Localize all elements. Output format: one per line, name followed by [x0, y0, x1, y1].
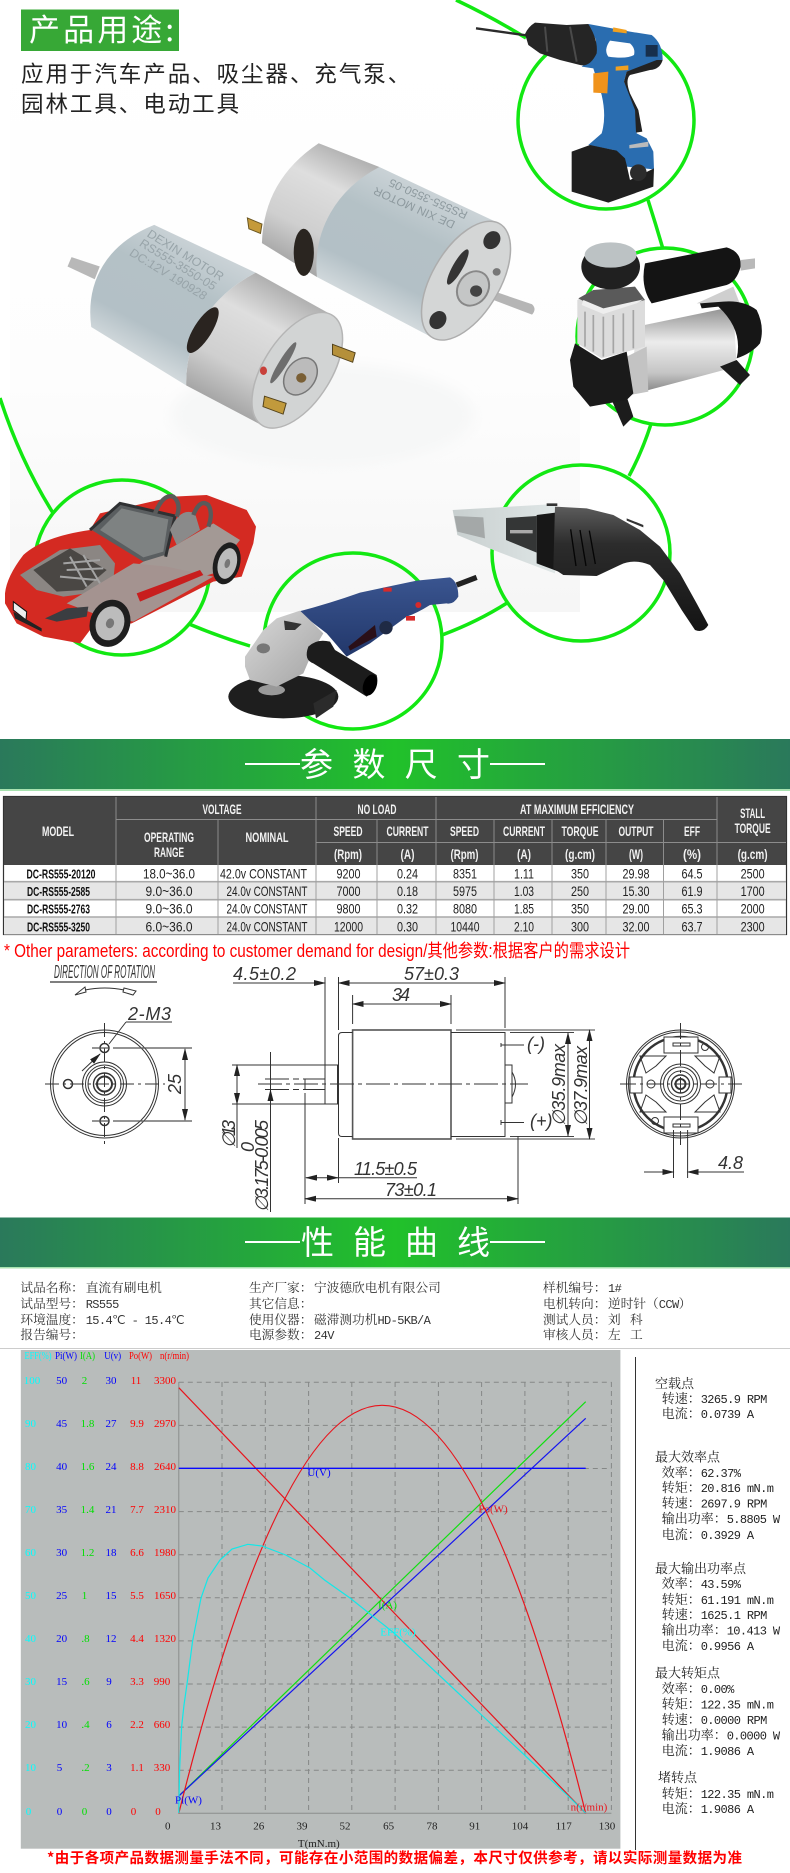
performance chart — [21, 1350, 620, 1850]
curve labels: U(V) — [307, 1467, 331, 1479]
row DC-RS555-2763: 9800 — [336, 901, 361, 917]
y scale: output power: 0 — [131, 1806, 137, 1818]
row DC-RS555-20120: 42.0v CONSTANT — [220, 865, 307, 881]
panel: key operating points: 转矩：61.191 mN.m — [662, 1589, 774, 1608]
table header: RANGE — [154, 844, 184, 860]
table header — [4, 797, 786, 865]
heading: product uses label: 产品用途: — [29, 5, 174, 50]
test information block: RS555 — [86, 1298, 119, 1312]
drawing: rear view — [620, 1023, 744, 1178]
panel: key operating points: 电流：0.9956 A — [662, 1635, 755, 1654]
y scale: output power: 9.9 — [130, 1418, 144, 1430]
drawing: side view: 0 — [238, 1142, 258, 1152]
photo: angle grinder — [228, 577, 477, 718]
y scale: input power: 0 — [57, 1806, 63, 1818]
row DC-RS555-20120: 29.98 — [622, 865, 650, 881]
row DC-RS555-2585: 1700 — [741, 883, 765, 899]
curve: output power Po — [179, 1405, 586, 1813]
table header: (g.cm) — [738, 846, 768, 862]
y scale: speed: 3300 — [154, 1375, 176, 1387]
row DC-RS555-3250 — [27, 918, 765, 934]
panel: product uses — [0, 0, 762, 729]
y scale: efficiency: 90 — [25, 1418, 36, 1430]
x scale: 91 — [469, 1820, 480, 1832]
y scale: output power: 3.3 — [130, 1676, 144, 1688]
photo: front motor — [68, 209, 362, 443]
table header: TORQUE — [562, 823, 598, 839]
test information block: 生产厂家： — [249, 1277, 312, 1296]
y scale: efficiency: 0 — [26, 1806, 32, 1818]
y scale: current: .8 — [81, 1633, 90, 1645]
x scale: 65 — [383, 1820, 395, 1832]
y scale: current: 1.6 — [81, 1461, 95, 1473]
y scale: output power: 2.2 — [130, 1719, 144, 1731]
x scale: 39 — [296, 1820, 308, 1832]
y scale: output power: 6.6 — [130, 1547, 144, 1559]
panel: key operating points: 输出功率：10.413 W — [662, 1620, 781, 1638]
curve labels: n(r/min) — [571, 1802, 608, 1814]
y scale: output power: 4.4 — [130, 1633, 144, 1645]
drawing: side view: (+) — [530, 1111, 552, 1131]
green connecting ring — [0, 0, 753, 729]
drawing: front view: DIRECTION OF ROTATION — [54, 962, 155, 982]
y scale: voltage: 18 — [106, 1547, 117, 1559]
panel: key operating points: 输出功率：0.0000 W — [662, 1724, 781, 1744]
row DC-RS555-2585: 0.18 — [397, 883, 418, 899]
axis titles: EFF(%) — [24, 1350, 52, 1362]
y scale: input power: 20 — [56, 1633, 68, 1645]
y scale: voltage: 3 — [106, 1762, 112, 1774]
photo: rear motor: RS555-3550-05 — [386, 176, 470, 221]
table header: OUTPUT — [618, 823, 654, 839]
y scale: input power: 25 — [56, 1590, 68, 1602]
row DC-RS555-20120: 9200 — [336, 865, 361, 881]
panel: key operating points: 堵转点 — [658, 1767, 698, 1786]
row DC-RS555-20120: 8351 — [453, 865, 477, 881]
y scale: current: 1.8 — [81, 1418, 95, 1430]
photo: cordless drill — [476, 23, 663, 203]
y scale: current: .6 — [81, 1676, 90, 1688]
table header: VOLTAGE — [202, 801, 242, 817]
y scale: speed: 0 — [155, 1806, 161, 1818]
y scale: input power: 15 — [56, 1676, 68, 1688]
row DC-RS555-20120 — [26, 865, 765, 881]
row DC-RS555-2763: 2000 — [741, 901, 765, 917]
photo: rear motor: DE XIN MOTOR — [371, 184, 457, 230]
test information block: 审核人员： — [543, 1324, 606, 1343]
x scale: 13 — [210, 1820, 222, 1832]
axis titles: n(r/min) — [160, 1350, 189, 1362]
test information block: 15.4℃ - 15.4℃ — [86, 1314, 184, 1328]
y scale: voltage: 30 — [106, 1375, 117, 1387]
panel: key operating points: 转矩：122.35 mN.m — [662, 1694, 774, 1713]
y scale: speed: 1320 — [154, 1633, 176, 1645]
x scale: 130 — [599, 1820, 616, 1832]
panel: key operating points: 电流：1.9086 A — [662, 1740, 755, 1759]
row DC-RS555-2763 — [27, 901, 765, 917]
y scale: current: 0 — [82, 1806, 88, 1818]
row DC-RS555-20120: 350 — [571, 865, 589, 881]
test information block: 工 — [630, 1324, 643, 1343]
note: other parameters: * Other parameters: according to customer demand for design/其他参数:根据客户的需求设计 — [4, 941, 630, 961]
row DC-RS555-3250: 2.10 — [514, 918, 534, 934]
y scale: speed: 330 — [154, 1762, 171, 1774]
curve labels: I(A) — [378, 1600, 397, 1612]
y scale: speed: 2310 — [154, 1504, 176, 1516]
soft shadow under motors — [171, 363, 474, 467]
chart grid — [179, 1382, 611, 1813]
table header: (%) — [683, 846, 701, 862]
curve labels: Po(W) — [478, 1504, 508, 1516]
row DC-RS555-2585: 15.30 — [622, 883, 650, 899]
panel: key operating points: 电流：1.9086 A — [662, 1798, 755, 1817]
y scale: current: 1 — [82, 1590, 87, 1602]
x scale: 52 — [340, 1820, 350, 1832]
technical drawing — [45, 962, 744, 1212]
row DC-RS555-2763: 24.0v CONSTANT — [226, 901, 308, 917]
x scale — [165, 1820, 616, 1850]
text: application description: 应用于汽车产品、吸尘器、充气泵、 — [21, 57, 412, 89]
row DC-RS555-2585: 5975 — [453, 883, 477, 899]
table header: (A) — [400, 846, 414, 862]
y scale: efficiency: 10 — [25, 1762, 36, 1774]
photo: front motor: DC:12V 190928 — [127, 246, 210, 303]
panel: key operating points: 最大效率点 — [655, 1447, 721, 1466]
row DC-RS555-3250: 6.0~36.0 — [146, 918, 193, 934]
table header: NOMINAL — [246, 829, 289, 845]
curve: voltage U — [179, 1467, 586, 1469]
drawing: side view: ∅35.9max — [549, 1043, 569, 1126]
row DC-RS555-2585: 24.0v CONSTANT — [226, 883, 308, 899]
test information block: 试品型号： — [20, 1293, 84, 1312]
axis titles: Po(W) — [129, 1350, 152, 1362]
y scale: efficiency: 70 — [25, 1504, 36, 1516]
y scale: input power: 35 — [56, 1504, 68, 1516]
table header: (Rpm) — [450, 846, 478, 862]
x scale: 78 — [426, 1820, 438, 1832]
row DC-RS555-20120: 2500 — [741, 865, 765, 881]
table row backgrounds — [4, 865, 786, 934]
row DC-RS555-2763: 0.32 — [397, 901, 418, 917]
drawing: side view: (-) — [527, 1034, 545, 1054]
y scale: voltage: 9 — [106, 1676, 112, 1688]
row DC-RS555-2763: 8080 — [453, 901, 477, 917]
backdrop: faint photo background — [10, 40, 580, 612]
curve labels: Pi(W) — [175, 1794, 202, 1806]
panel: key operating points — [655, 1373, 781, 1817]
drawing: side view: ∅3.175-0.005 — [252, 1119, 272, 1212]
row DC-RS555-2763: 9.0~36.0 — [146, 901, 193, 917]
table header: OPERATING — [144, 829, 194, 845]
row DC-RS555-3250: 300 — [571, 918, 589, 934]
y scale: efficiency: 50 — [25, 1590, 36, 1602]
row DC-RS555-2585: 9.0~36.0 — [146, 883, 193, 899]
row DC-RS555-2585 — [27, 883, 765, 899]
y scale: input power: 10 — [56, 1719, 68, 1731]
row DC-RS555-3250: 63.7 — [682, 918, 703, 934]
drawing: front view — [45, 962, 192, 1146]
section banner: performance curves: 性能曲线 — [301, 1216, 490, 1264]
test information block: CCW） — [659, 1293, 691, 1312]
panel: key operating points: 效率：62.37% — [662, 1462, 742, 1481]
y scale: output power: 1.1 — [130, 1762, 144, 1774]
y scale: current: 1.2 — [81, 1547, 94, 1559]
test information block: HD-5KB/A — [377, 1314, 432, 1328]
test information block: 科 — [630, 1309, 643, 1328]
test information block: 刘 — [608, 1309, 621, 1328]
row DC-RS555-2585: DC-RS555-2585 — [27, 884, 90, 899]
table header: (g.cm) — [565, 846, 595, 862]
y scale: voltage — [106, 1375, 117, 1818]
row DC-RS555-2763: 350 — [571, 901, 589, 917]
curve: input power Pi — [179, 1418, 586, 1796]
panel: key operating points: 最大输出功率点 — [655, 1558, 747, 1577]
row DC-RS555-3250: 2300 — [741, 918, 765, 934]
curve labels — [175, 1467, 608, 1814]
table header: (Rpm) — [334, 846, 362, 862]
axis titles: Pi(W) — [55, 1350, 77, 1362]
axis titles: U(v) — [104, 1350, 121, 1362]
row DC-RS555-20120: 0.24 — [397, 865, 418, 881]
y scale: efficiency: 60 — [25, 1547, 36, 1559]
y scale: current — [81, 1375, 95, 1818]
curve: current I — [179, 1402, 586, 1796]
test information block: 逆时针（ — [608, 1293, 659, 1312]
y scale: input power: 5 — [57, 1762, 63, 1774]
axis titles: I(A) — [80, 1350, 95, 1362]
y scale: speed: 1650 — [154, 1590, 176, 1602]
y scale: voltage: 27 — [106, 1418, 117, 1430]
y scale: voltage: 21 — [106, 1504, 116, 1516]
row DC-RS555-3250: 32.00 — [622, 918, 650, 934]
panel: key operating points: 电流：0.3929 A — [662, 1524, 755, 1543]
y scale: output power: 8.8 — [130, 1461, 144, 1473]
table header: (A) — [517, 846, 531, 862]
y scale: input power: 45 — [56, 1418, 68, 1430]
test information block: 报告编号： — [20, 1324, 84, 1343]
x scale: 117 — [556, 1820, 572, 1832]
section banner: parameters and dimensions: 参数尺寸 — [300, 738, 490, 786]
y scale: speed: 2640 — [154, 1461, 176, 1473]
photo: cutaway car — [5, 495, 256, 653]
text: application description: 园林工具、电动工具 — [21, 87, 241, 119]
test information block: 1# — [608, 1282, 622, 1296]
panel: key operating points: 转速：3265.9 RPM — [662, 1388, 767, 1407]
photo: front motor: DEXIN MOTOR — [144, 227, 227, 284]
footer note: measurement disclaimer: *由于各项产品数据测量手法不同，可能存在小范围的数据偏差，本尺寸仅供参考，请以实际测量数据为准 — [47, 1847, 742, 1868]
test information block: 其它信息： — [249, 1293, 312, 1312]
y scale: efficiency: 40 — [25, 1633, 36, 1645]
row DC-RS555-2763: DC-RS555-2763 — [27, 902, 90, 917]
panel: key operating points: 转速：0.0000 RPM — [662, 1709, 767, 1728]
panel: key operating points: 输出功率：5.8805 W — [662, 1508, 781, 1527]
divider: vertical line — [634, 1357, 636, 1850]
table header: AT MAXIMUM EFFICIENCY — [520, 801, 634, 817]
photo: handheld vacuum — [453, 503, 708, 631]
drawing: side view — [219, 964, 595, 1212]
y scale: efficiency: 20 — [25, 1719, 36, 1731]
curve labels: EFF(%) — [380, 1626, 416, 1638]
x scale: 0 — [165, 1820, 171, 1832]
section banner: performance curves — [0, 1216, 790, 1268]
row DC-RS555-3250: 12000 — [334, 918, 363, 934]
row DC-RS555-2585: 7000 — [336, 883, 361, 899]
drawing: side view: ∅13 — [219, 1120, 239, 1148]
y scale: efficiency: 80 — [25, 1461, 36, 1473]
y scale: output power: 7.7 — [130, 1504, 144, 1516]
drawing: side view: 11.5±0.5 — [354, 1159, 418, 1179]
table header: STALL — [740, 805, 765, 821]
table header: EFF — [684, 823, 700, 839]
drawing: rear view: 4.8 — [718, 1153, 743, 1173]
y scale: speed: 2970 — [154, 1418, 176, 1430]
drawing: side view: ∅37.9max — [571, 1045, 591, 1126]
y scale: voltage: 15 — [106, 1590, 117, 1602]
curve: efficiency — [179, 1544, 586, 1813]
row DC-RS555-20120: 1.11 — [514, 865, 534, 881]
y scale: current: 2 — [82, 1375, 87, 1387]
panel: key operating points: 空载点 — [655, 1373, 695, 1392]
y scale: speed: 1980 — [154, 1547, 176, 1559]
panel: key operating points: 转速：2697.9 RPM — [662, 1493, 767, 1512]
drawing: side view: 57±0.3 — [404, 964, 459, 984]
photo: rear motor — [244, 129, 535, 353]
y scale: input power: 40 — [56, 1461, 68, 1473]
row DC-RS555-20120: 64.5 — [682, 865, 703, 881]
table: motor specifications — [4, 796, 786, 934]
test information block — [20, 1277, 691, 1343]
x scale: T(mN.m) — [298, 1838, 340, 1850]
table header: CURRENT — [386, 823, 429, 839]
table header: (W) — [629, 846, 643, 862]
x scale: 26 — [253, 1820, 265, 1832]
row DC-RS555-2763: 1.85 — [514, 901, 534, 917]
test information block: 磁滞测功机 — [314, 1309, 378, 1328]
table header: SPEED — [334, 823, 362, 839]
row DC-RS555-2763: 65.3 — [682, 901, 703, 917]
row DC-RS555-3250: 0.30 — [397, 918, 418, 934]
row DC-RS555-2585: 250 — [571, 883, 589, 899]
test information block: 测试人员： — [543, 1309, 606, 1328]
row DC-RS555-20120: 18.0~36.0 — [143, 865, 195, 881]
row DC-RS555-3250: DC-RS555-3250 — [27, 919, 90, 934]
y scale: output power: 11 — [131, 1375, 141, 1387]
test information block: 电机转向： — [543, 1293, 606, 1312]
test information block: 直流有刷电机 — [86, 1277, 162, 1296]
panel: key operating points: 效率：43.59% — [662, 1573, 742, 1592]
y scale: speed: 990 — [154, 1676, 171, 1688]
test information block: 电源参数： — [249, 1324, 312, 1343]
photo: front motor: RS555-3550-05 — [137, 236, 219, 293]
row DC-RS555-3250: 10440 — [450, 918, 480, 934]
y scale: efficiency: 100 — [24, 1375, 41, 1387]
panel: key operating points: 转矩：122.35 mN.m — [662, 1783, 774, 1802]
test information block: 使用仪器： — [249, 1309, 312, 1328]
drawing: side view: 34 — [392, 985, 410, 1005]
panel: key operating points: 最大转矩点 — [655, 1663, 721, 1682]
panel: key operating points: 电流：0.0739 A — [662, 1403, 755, 1422]
axis titles — [24, 1350, 189, 1362]
y scale: voltage: 24 — [106, 1461, 117, 1473]
y scale: input power: 30 — [56, 1547, 68, 1559]
test information block: 24V — [314, 1329, 335, 1343]
test information block: 样机编号： — [543, 1277, 606, 1296]
photo: air compressor — [570, 242, 762, 427]
table header: SPEED — [450, 823, 479, 839]
y scale: output power: 5.5 — [130, 1590, 144, 1602]
y scale: voltage: 0 — [106, 1806, 112, 1818]
drawing: front view: 25 — [165, 1073, 185, 1095]
y scale: input power — [56, 1375, 68, 1818]
y scale: current: 1.4 — [81, 1504, 95, 1516]
row DC-RS555-20120: DC-RS555-20120 — [26, 866, 96, 881]
table header: CURRENT — [503, 823, 545, 839]
y scale: current: .4 — [81, 1719, 90, 1731]
y scale: input power: 50 — [56, 1375, 68, 1387]
drawing: front view: 2-M3 — [127, 1004, 171, 1024]
panel: key operating points: 转矩：20.816 mN.m — [662, 1477, 774, 1496]
curve: speed n — [179, 1388, 586, 1813]
test information block: 环境温度： — [20, 1309, 84, 1328]
row DC-RS555-2585: 61.9 — [682, 883, 703, 899]
y scale: output power — [130, 1375, 144, 1818]
panel: key operating points: 效率：0.00% — [662, 1678, 735, 1697]
drawing: side view: 4.5±0.2 — [233, 964, 296, 984]
row DC-RS555-3250: 24.0v CONSTANT — [226, 918, 308, 934]
test information block: 试品名称： — [20, 1277, 84, 1296]
x scale: 104 — [512, 1820, 529, 1832]
table header: NO LOAD — [358, 801, 396, 817]
row DC-RS555-2763: 29.00 — [622, 901, 650, 917]
y scale: efficiency — [24, 1375, 41, 1818]
row DC-RS555-2585: 1.03 — [514, 883, 534, 899]
test information block: 宁波德欣电机有限公司 — [314, 1277, 441, 1296]
drawing: side view: 73±0.1 — [385, 1180, 437, 1200]
y scale: speed — [154, 1375, 176, 1818]
y scale: speed: 660 — [154, 1719, 171, 1731]
y scale: current: .2 — [81, 1762, 90, 1774]
table header: MODEL — [42, 823, 74, 839]
test information block: 左 — [608, 1324, 621, 1343]
panel: key operating points: 转速：1625.1 RPM — [662, 1604, 767, 1623]
y scale: efficiency: 30 — [25, 1676, 36, 1688]
text: application description — [21, 57, 412, 119]
y scale: voltage: 6 — [106, 1719, 112, 1731]
y scale: voltage: 12 — [106, 1633, 116, 1645]
section banner: parameters and dimensions — [0, 738, 790, 791]
